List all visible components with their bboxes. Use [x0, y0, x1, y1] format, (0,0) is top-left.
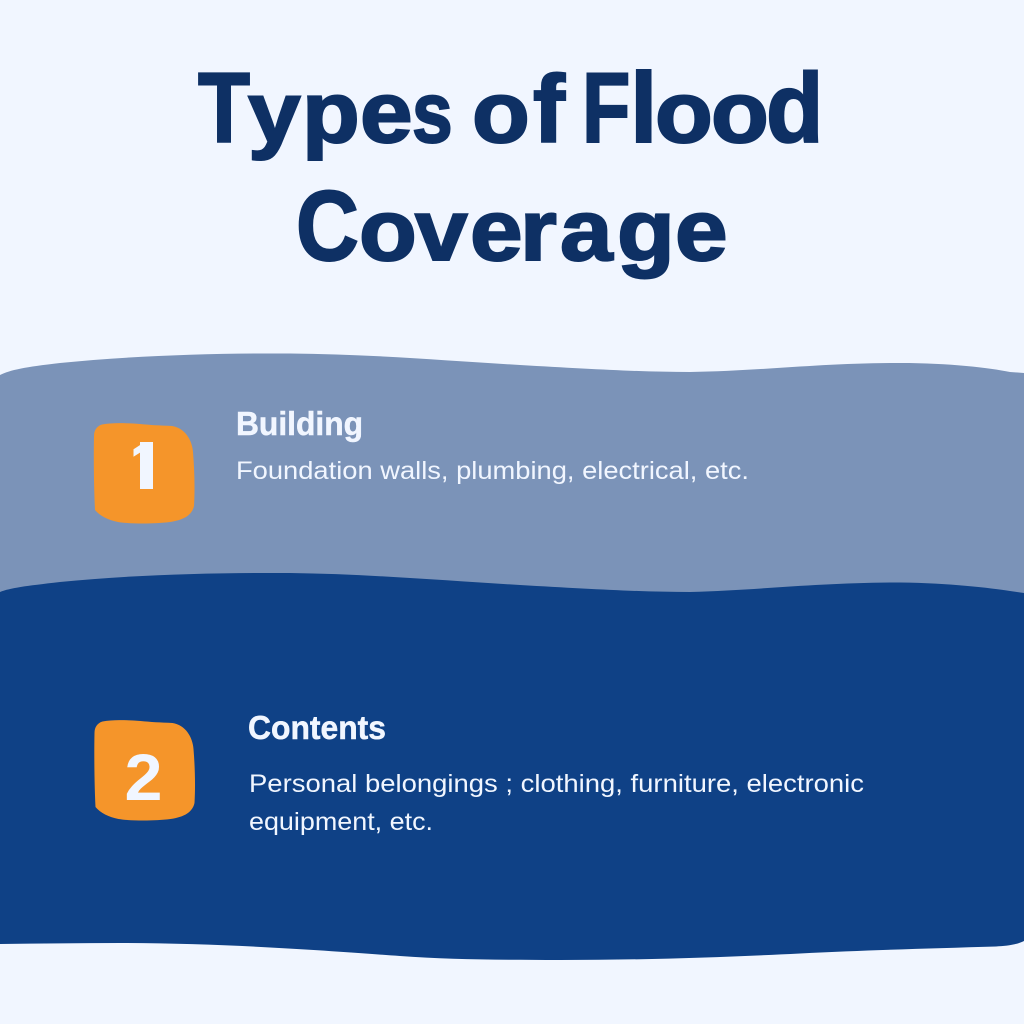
title: l: [630, 52, 658, 163]
title: [198, 52, 823, 281]
contents wave background: [0, 573, 1024, 960]
title: overage: [359, 183, 728, 279]
building heading: Building: [236, 405, 363, 442]
title: F: [582, 53, 630, 163]
badge 2: [94, 720, 195, 820]
title: T: [198, 52, 250, 163]
title: d: [766, 54, 823, 163]
panel: contents: [0, 573, 1024, 960]
building wave background: [0, 353, 1024, 620]
building description: Foundation walls, plumbing, electrical, etc.: [236, 457, 749, 485]
contents description: Personal belongings ; clothing, furniture, electronic: [249, 770, 864, 798]
title: o: [472, 65, 530, 161]
title: C: [296, 171, 359, 281]
contents heading: Contents: [248, 709, 386, 746]
contents description: [249, 770, 864, 836]
badge 1: [94, 423, 195, 524]
title: oo: [655, 65, 769, 161]
title: ype: [248, 65, 413, 161]
panel: building: [0, 354, 1024, 593]
title: s: [412, 64, 453, 160]
badge 1: 1: [128, 428, 166, 504]
title: f: [533, 56, 566, 163]
contents description: equipment, etc.: [249, 808, 433, 836]
badge 2: 2: [124, 740, 162, 814]
